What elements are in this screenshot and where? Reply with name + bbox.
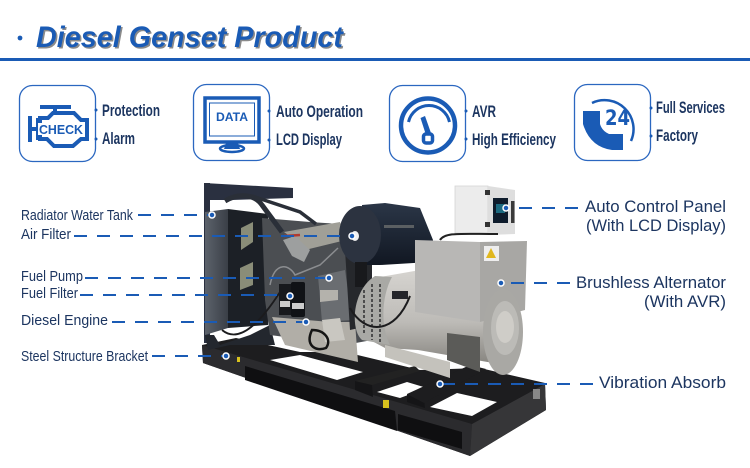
callout dots bbox=[209, 205, 509, 387]
icon: gauge bbox=[401, 98, 455, 152]
icon: check engine bbox=[30, 107, 87, 146]
title: Diesel Genset Product bbox=[36, 21, 345, 54]
genset illustration bbox=[202, 183, 546, 456]
icon: 24 hour phone bbox=[583, 100, 634, 150]
panel: auto operation lcd: LCD Display bbox=[276, 130, 342, 149]
panel: full services factory: Factory bbox=[656, 126, 698, 145]
panel: avr high efficiency bbox=[390, 86, 556, 162]
labels: left: Diesel Engine bbox=[21, 312, 108, 329]
labels: left: Radiator Water Tank bbox=[21, 207, 133, 224]
panel: full services factory bbox=[574, 84, 725, 160]
labels: left: Fuel Filter bbox=[21, 285, 78, 302]
panel: protection alarm: Protection bbox=[102, 101, 160, 120]
steel base frame bbox=[202, 338, 546, 456]
icon: monitor bbox=[205, 98, 259, 152]
labels: right: Vibration Absorb bbox=[599, 373, 726, 392]
panel: protection alarm bbox=[20, 86, 160, 162]
labels: right: Auto Control Panel bbox=[585, 197, 726, 216]
hoses bbox=[222, 196, 338, 349]
labels: left: Steel Structure Bracket bbox=[21, 348, 149, 365]
labels: left: Air Filter bbox=[21, 226, 71, 243]
engine block bbox=[262, 218, 372, 362]
alternator end bell bbox=[483, 289, 523, 375]
title rule bbox=[0, 58, 750, 61]
labels: right: (With LCD Display) bbox=[586, 216, 726, 235]
panel: avr high efficiency: High Efficiency bbox=[472, 130, 556, 149]
icon: check engine: CHECK bbox=[39, 122, 84, 137]
labels: right: (With AVR) bbox=[644, 292, 726, 311]
icon: monitor: DATA bbox=[216, 110, 248, 124]
icon: 24 hour phone: 24 bbox=[605, 106, 630, 130]
labels: right bbox=[576, 197, 726, 392]
fuel filters bbox=[279, 282, 305, 317]
labels: left: Fuel Pump bbox=[21, 268, 83, 285]
labels: left bbox=[21, 207, 149, 365]
radiator bbox=[204, 183, 293, 350]
title: Diesel Genset Product bbox=[38, 22, 346, 56]
leader lines bbox=[74, 208, 593, 384]
alternator body bbox=[350, 270, 505, 378]
labels: right: Brushless Alternator bbox=[576, 273, 726, 292]
air filter bbox=[339, 203, 433, 287]
panel: auto operation lcd: Auto Operation bbox=[276, 102, 363, 121]
panel: protection alarm: Alarm bbox=[102, 129, 135, 148]
panel: avr high efficiency: AVR bbox=[472, 102, 496, 121]
panel: auto operation lcd bbox=[194, 84, 363, 160]
control panel box bbox=[440, 186, 515, 240]
alternator terminal box bbox=[415, 240, 527, 322]
